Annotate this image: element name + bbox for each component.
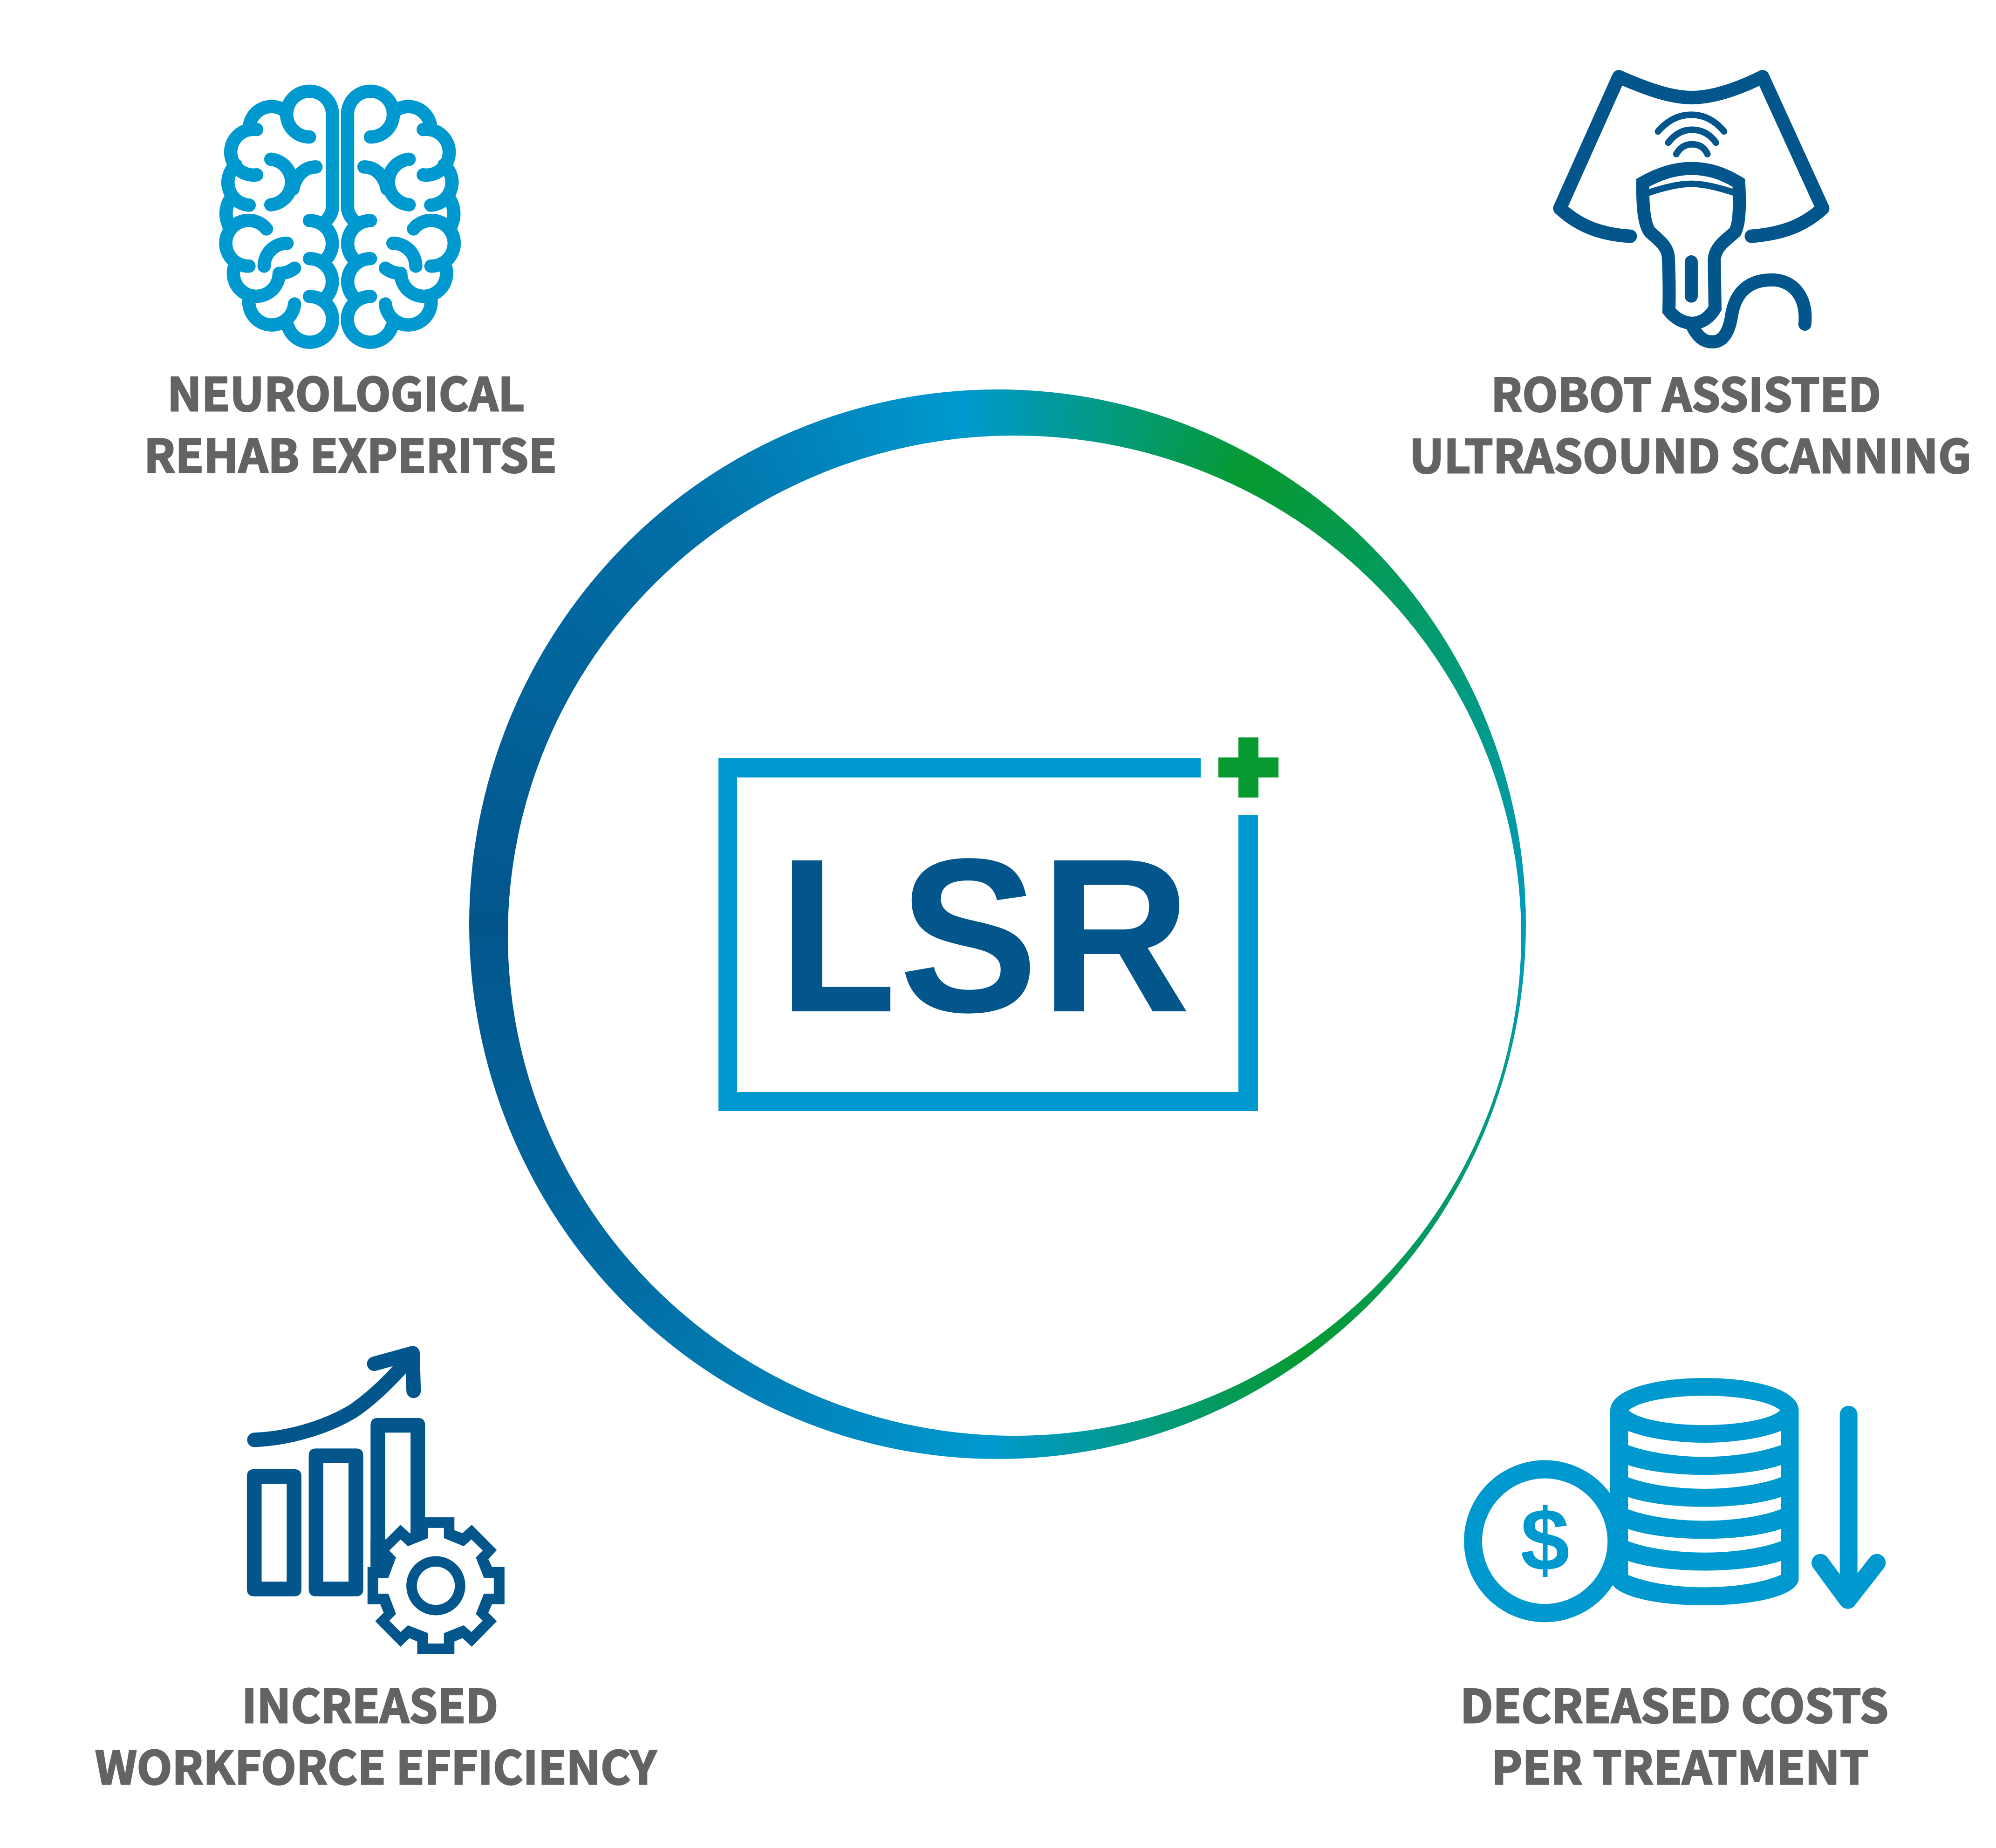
- logo: LSR box with plus: [718, 737, 1278, 1111]
- label: robot assisted ultrasound scanning: ULTRASOUND SCANNING: [1409, 420, 1971, 486]
- icon: ultrasound probe: [1560, 77, 1823, 342]
- label: increased workforce efficiency: INCREASED: [242, 1670, 498, 1736]
- label: robot assisted ultrasound scanning: ROBOT ASSISTED: [1491, 359, 1881, 425]
- chart bars: [247, 1469, 301, 1596]
- gradient ring: [469, 389, 1526, 1459]
- label: robot assisted ultrasound scanning: [1409, 359, 1971, 486]
- dollar sign: $: [1520, 1491, 1570, 1589]
- logo frame: [718, 758, 1258, 1111]
- label: decreased costs per treatment: [1460, 1670, 1888, 1798]
- label: decreased costs per treatment: PER TREATMENT: [1491, 1732, 1869, 1798]
- icon: coins with down arrow: [1464, 1378, 1877, 1622]
- gear: [368, 1517, 505, 1654]
- rising arrow: [254, 1353, 414, 1440]
- coin: [1464, 1460, 1626, 1622]
- label: neurological rehab expertise: [144, 358, 557, 486]
- label: neurological rehab expertise: REHAB EXPERITSE: [144, 420, 557, 486]
- label: increased workforce efficiency: [95, 1670, 657, 1798]
- label: increased workforce efficiency: WORKFORCE EFFICIENCY: [95, 1732, 657, 1798]
- icon: brain: [226, 91, 454, 342]
- coin stack: [1610, 1378, 1798, 1605]
- label: neurological rehab expertise: NEUROLOGICAL: [167, 358, 525, 424]
- logo letters: LSR: [778, 813, 1191, 1058]
- logo plus: [1218, 737, 1278, 798]
- trim of L foot: [890, 978, 902, 1016]
- icon: bar chart with gear and arrow: [247, 1353, 505, 1654]
- down arrow: [1820, 1415, 1877, 1600]
- label: decreased costs per treatment: DECREASED COSTS: [1460, 1670, 1888, 1736]
